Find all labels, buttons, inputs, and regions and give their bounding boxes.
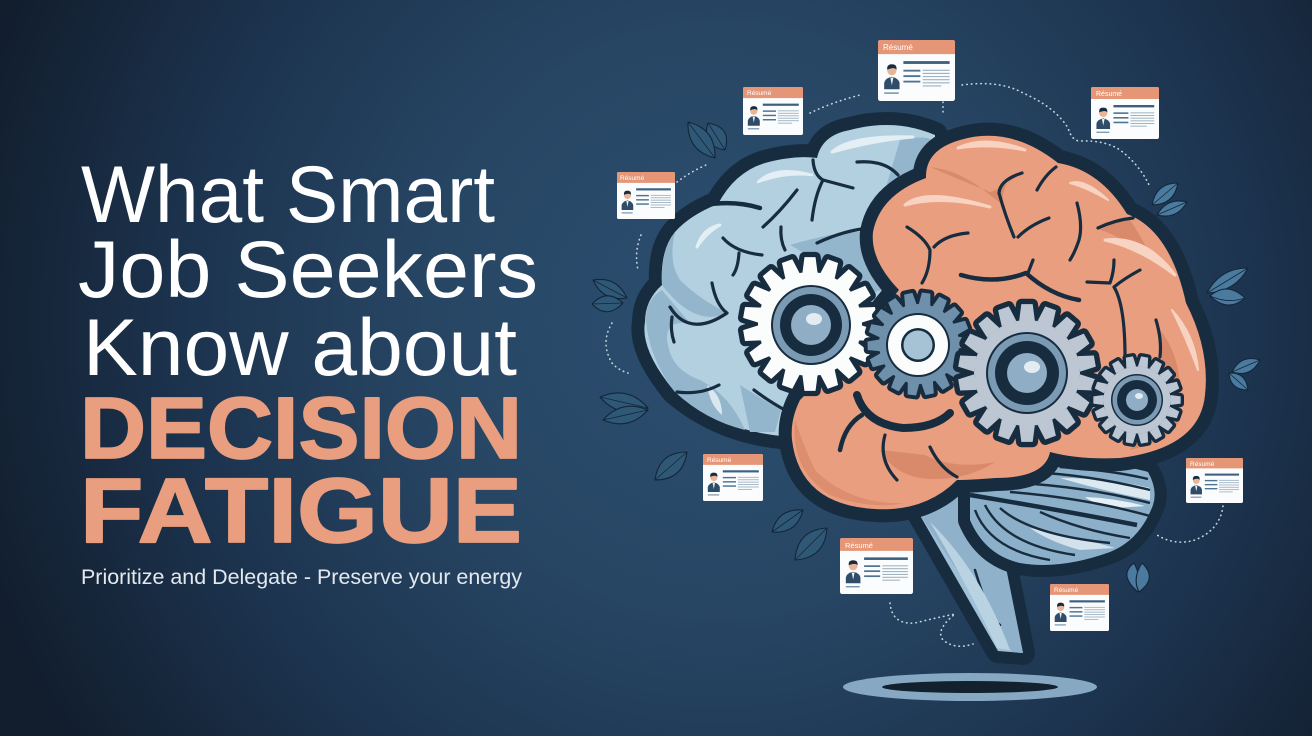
leaf pair lower left: [600, 393, 648, 424]
resume card bottom left: [840, 538, 913, 594]
left hemisphere blue: [644, 125, 935, 436]
title line 3: Know about: [83, 303, 517, 393]
orange highlights: [958, 142, 1025, 150]
brain stem: [918, 488, 1023, 653]
leaf pair far left: [592, 279, 627, 312]
dotted connector lines: [606, 84, 1223, 646]
leaf pair below left: [772, 510, 827, 560]
resume card left: [617, 172, 675, 219]
gear 2 blue: [861, 286, 977, 402]
blue sulci: [670, 160, 898, 410]
resume card top right: Résumé: [1096, 91, 1122, 98]
blue highlights: [832, 137, 913, 152]
leaf pair bottom: [1127, 563, 1149, 592]
orange shading: [930, 167, 1025, 205]
leaf pair far right: [1229, 358, 1260, 390]
floor shadow ellipse: [843, 673, 1097, 701]
resume card bottom right: [1050, 584, 1109, 631]
headline text block: [78, 150, 538, 589]
single leaf: [655, 452, 687, 480]
highlight word fatigue: FATIGUE: [80, 460, 522, 562]
resume card top left: [743, 87, 803, 135]
blue shading: [646, 290, 745, 430]
resume card top left: Résumé: [747, 90, 772, 97]
resume cards: [617, 40, 1243, 631]
gear 3 grey: [958, 304, 1096, 442]
leaf pair upper right: [1152, 183, 1187, 216]
subtitle: Prioritize and Delegate - Preserve your energy: [81, 566, 523, 589]
resume card lower right: [1186, 458, 1243, 503]
gear 1 white: [743, 257, 877, 391]
resume card lower left: Résumé: [707, 457, 732, 464]
title line 2: Job Seekers: [78, 225, 538, 315]
cerebellum: [970, 464, 1155, 565]
leaf pair top left: [688, 122, 727, 158]
resume card lower left: [703, 454, 763, 501]
resume card left: Résumé: [620, 175, 645, 182]
resume card bottom left: Résumé: [845, 541, 873, 550]
orange sulci: [840, 167, 1160, 480]
highlight word decision: DECISION: [80, 380, 522, 477]
resume card top center: Résumé: [883, 43, 913, 52]
resume card lower right: Résumé: [1190, 461, 1215, 468]
leaf pair right: [1207, 268, 1248, 305]
resume card top right: [1091, 87, 1159, 139]
gear 4 small grey: [1086, 349, 1188, 451]
brain illustration: [644, 125, 1206, 653]
title line 1: What Smart: [81, 150, 495, 240]
right hemisphere orange: [792, 136, 1206, 509]
resume card bottom right: Résumé: [1054, 587, 1079, 594]
decorative leaves: [592, 122, 1260, 592]
resume card top center: [878, 40, 955, 101]
